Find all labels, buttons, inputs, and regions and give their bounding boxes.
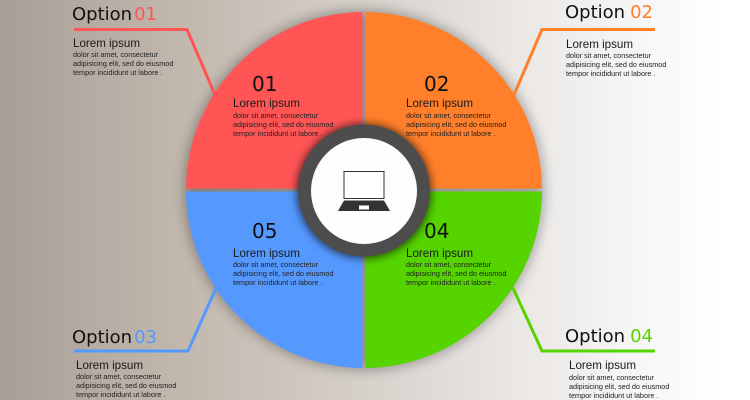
connector: option 02 xyxy=(513,30,655,97)
hub with laptop icon xyxy=(298,124,430,256)
panel: option 01: adipisicing elit, sed do eiusmod xyxy=(73,59,173,68)
panel: segment 04 text xyxy=(406,219,506,287)
panel: segment 01 text: adipisicing elit, sed do eiusmod xyxy=(233,120,333,129)
panel: option 02 xyxy=(565,2,666,78)
panel: segment 01 text xyxy=(233,72,333,138)
panel: option 04: Lorem ipsum xyxy=(569,359,636,372)
panel: segment 05 text: tempor incididunt ut labore . xyxy=(233,278,322,287)
panel: segment 02 text: dolor sit amet, consectetur xyxy=(406,111,492,120)
segment: orange xyxy=(366,12,542,188)
panel: segment 02 text: adipisicing elit, sed do eiusmod xyxy=(406,120,506,129)
segment: blue xyxy=(186,192,362,368)
panel: segment 05 text: adipisicing elit, sed do eiusmod xyxy=(233,269,333,278)
panel: segment 01 text: tempor incididunt ut labore . xyxy=(233,129,322,138)
panel: segment 04 text: tempor incididunt ut labore . xyxy=(406,278,495,287)
panel: segment 01 text: 01 xyxy=(252,72,277,96)
segment: green xyxy=(366,192,542,368)
panel: option 03: Option03 xyxy=(72,327,157,348)
panel: option 04: tempor incididunt ut labore . xyxy=(569,391,658,400)
panel: option 03: Lorem ipsum xyxy=(76,359,143,372)
hub disc xyxy=(311,138,417,244)
panel: option 03: adipisicing elit, sed do eiusmod xyxy=(76,381,176,390)
panel: segment 05 text: dolor sit amet, consectetur xyxy=(233,260,319,269)
panel: option 02: dolor sit amet, consectetur xyxy=(566,51,652,60)
panel: segment 05 text: Lorem ipsum xyxy=(233,247,300,260)
panel: segment 02 text: 02 xyxy=(424,72,449,96)
panel: option 04 xyxy=(565,326,669,400)
panel: segment 04 text: dolor sit amet, consectetur xyxy=(406,260,492,269)
connector: option 01 xyxy=(74,30,216,97)
connector: option 03 xyxy=(74,288,216,351)
panel: option 04: dolor sit amet, consectetur xyxy=(569,373,655,382)
panel: option 03: dolor sit amet, consectetur xyxy=(76,372,162,381)
panel: segment 02 text: Lorem ipsum xyxy=(406,97,473,110)
panel: segment 05 text xyxy=(233,219,333,287)
panel: option 01: Lorem ipsum xyxy=(73,37,140,50)
panel: segment 05 text: 05 xyxy=(252,219,277,243)
panel: option 02: adipisicing elit, sed do eiusmod xyxy=(566,60,666,69)
panel: option 01: tempor incididunt ut labore . xyxy=(73,68,162,77)
hub ring xyxy=(298,124,430,256)
panel: option 01: Option01 xyxy=(72,4,157,25)
panel: segment 04 text: 04 xyxy=(424,219,449,243)
panel: option 02: Lorem ipsum xyxy=(566,38,633,51)
panel: segment 01 text: dolor sit amet, consectetur xyxy=(233,111,319,120)
panel: option 02: Option 02 xyxy=(565,2,653,23)
panel: option 04: Option 04 xyxy=(565,326,653,347)
panel: option 03: tempor incididunt ut labore . xyxy=(76,390,165,399)
panel: option 04: adipisicing elit, sed do eiusmod xyxy=(569,382,669,391)
panel: segment 02 text xyxy=(406,72,506,138)
panel: segment 01 text: Lorem ipsum xyxy=(233,97,300,110)
panel: segment 04 text: Lorem ipsum xyxy=(406,247,473,260)
hub shadow xyxy=(296,123,432,259)
panel: option 01: dolor sit amet, consectetur xyxy=(73,50,159,59)
panel: option 01 xyxy=(72,4,173,77)
connector: option 04 xyxy=(513,288,655,351)
icon: laptop xyxy=(338,172,390,211)
panel: segment 02 text: tempor incididunt ut labore . xyxy=(406,129,495,138)
panel: segment 04 text: adipisicing elit, sed do eiusmod xyxy=(406,269,506,278)
circular diagram xyxy=(186,12,542,368)
circle shadow xyxy=(184,10,544,370)
segment: red xyxy=(186,12,362,188)
panel: option 02: tempor incididunt ut labore . xyxy=(566,69,655,78)
panel: option 03 xyxy=(72,327,176,399)
